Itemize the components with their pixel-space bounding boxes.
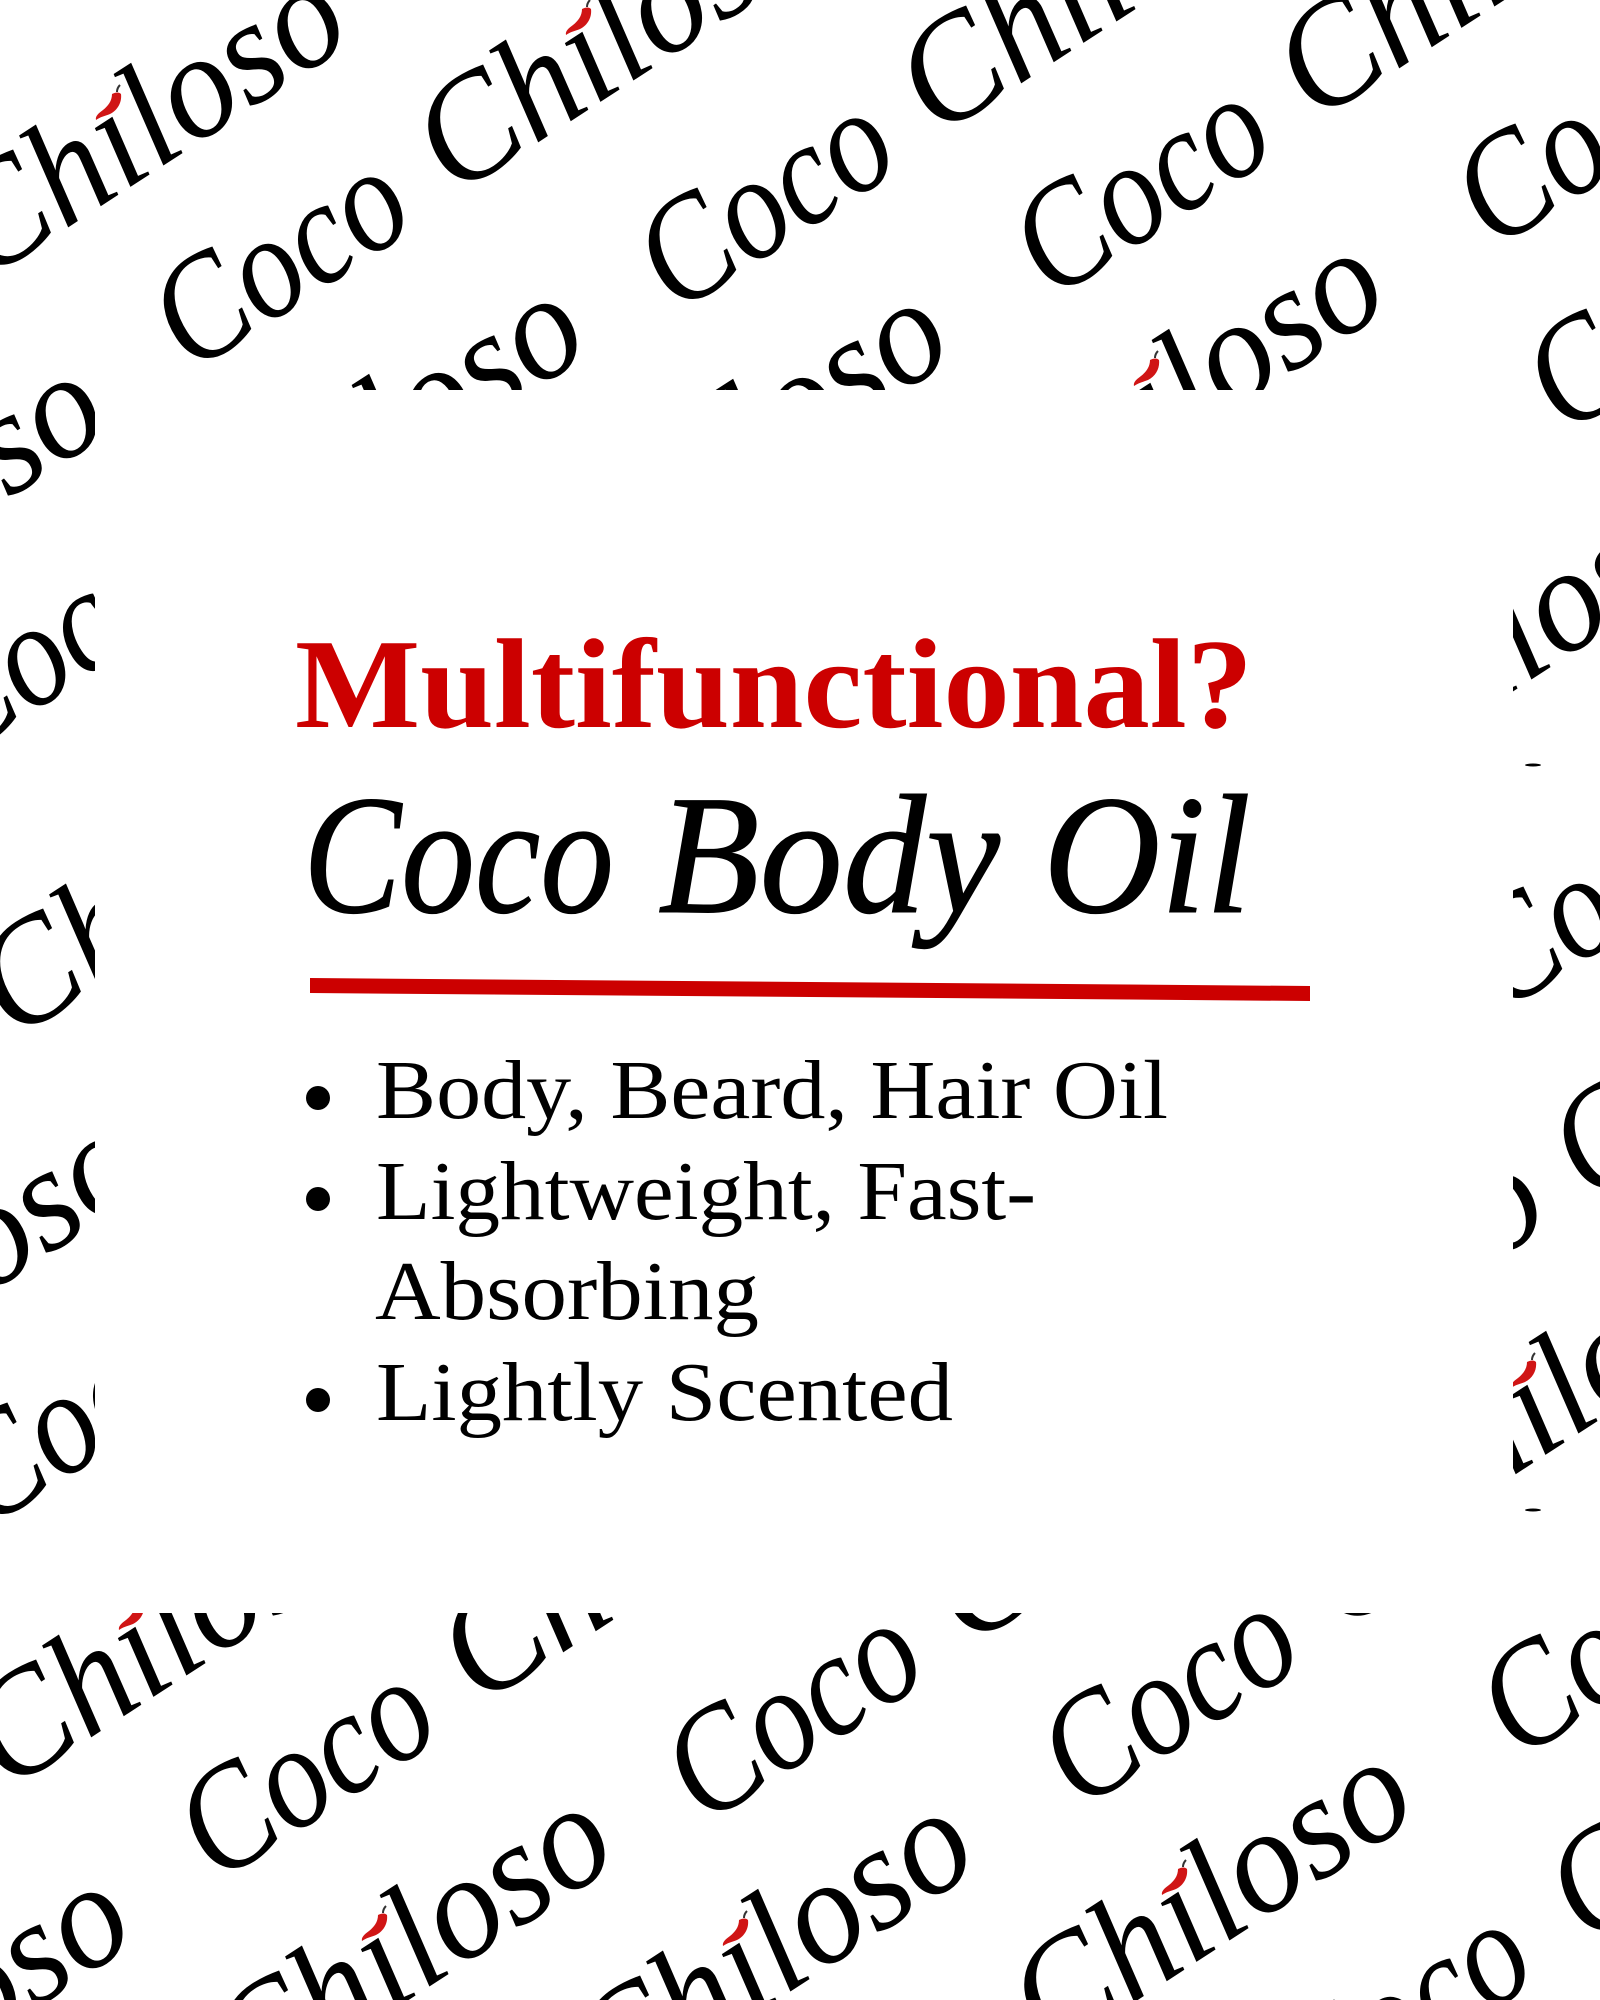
bullet list: [306, 1044, 1168, 1439]
bullet item: lightweight, fast-absorbing: Lightweight, Fast-: [376, 1145, 1036, 1238]
background: bottom band of wordmark pattern: Coco: [632, 1566, 951, 1854]
bullet item: lightweight, fast-absorbing: [306, 1145, 1036, 1338]
background: bottom band of wordmark pattern: Coco: [145, 1624, 464, 1912]
background: bottom band of wordmark pattern: Coco: [1008, 1551, 1327, 1839]
background: repeated brand wordmark pattern: Coco: [604, 55, 923, 343]
subheading: Coco Body Oil: Body: [658, 761, 1001, 949]
heading: Multifunctional?: Multifunctional?: [295, 613, 1253, 755]
background: repeated brand wordmark pattern: Chiloso: [150, 239, 612, 620]
subheading: Coco Body Oil: Oil: [1043, 761, 1251, 949]
background: bottom band of wordmark pattern: Chiloso: [407, 1353, 869, 1734]
red underline: [310, 978, 1310, 1001]
background: repeated brand wordmark pattern: Coco: [119, 114, 438, 402]
background: repeated brand wordmark pattern: Chiloso: [1110, 1110, 1572, 1491]
background: bottom band of wordmark pattern: [0, 1613, 1600, 2000]
background: bottom band of wordmark pattern: Chiloso: [896, 1294, 1358, 1675]
background: repeated brand wordmark pattern: Coco: [980, 41, 1299, 329]
background: repeated brand wordmark pattern: Chiloso: [514, 244, 976, 625]
bullet item: lightly scented: Lightly Scented: [376, 1346, 953, 1439]
background: repeated brand wordmark pattern: Chiloso: [950, 194, 1412, 575]
subheading: Coco Body Oil: Coco: [303, 761, 614, 949]
subheading: Coco Body Oil: [303, 761, 1251, 949]
bullet item: body, beard, hair oil: Body, Beard, Hair Oil: [376, 1044, 1168, 1137]
background: repeated brand wordmark pattern: [0, 0, 1600, 1577]
bullet item: lightweight, fast-absorbing: Absorbing: [375, 1245, 759, 1338]
panel: white centre card: [95, 390, 1513, 1613]
